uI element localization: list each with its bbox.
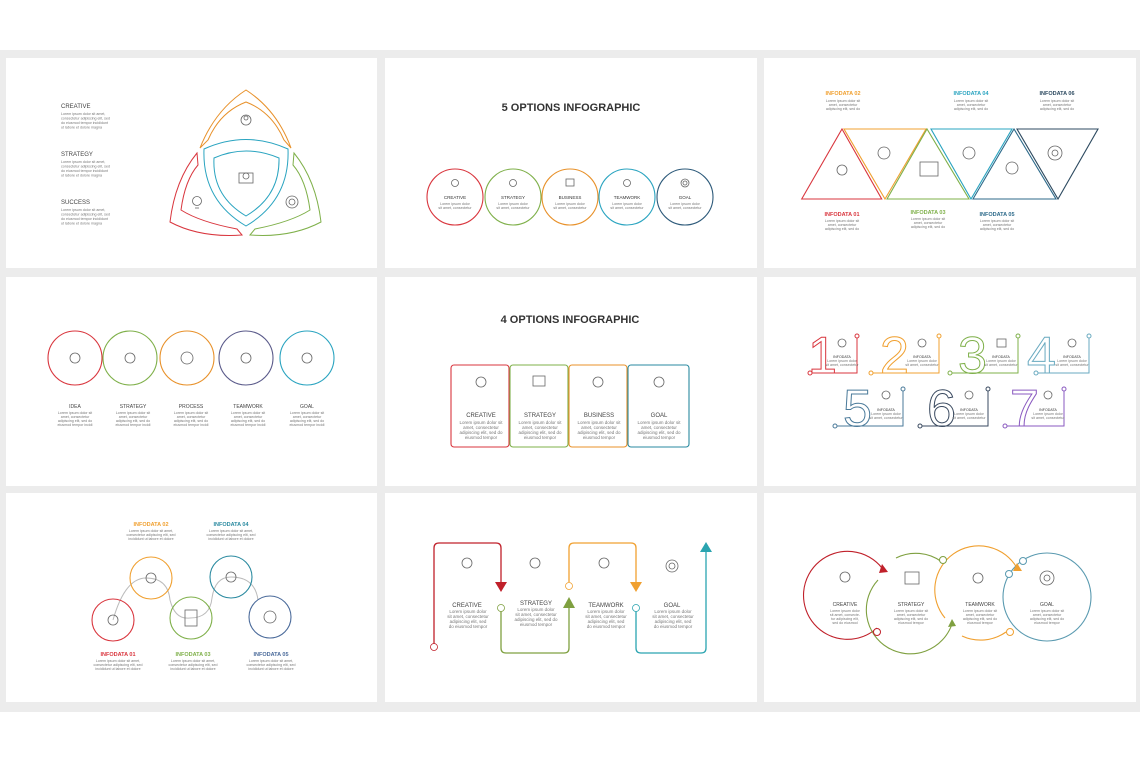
icons and labels: sit amet, consectetur: [825, 363, 859, 367]
labels: Lorem ipsum dolor: [449, 609, 487, 614]
panel: 5 options: [385, 58, 757, 268]
labels: INFODATA 02: [825, 91, 861, 97]
labels: eiusmod tempor incidi: [231, 423, 266, 427]
labels: [447, 601, 694, 629]
labels: INFODATA 04: [953, 91, 989, 97]
labels: INFODATA 02: [133, 522, 169, 528]
icons and labels: Lorem ipsum dolor: [1033, 412, 1064, 416]
icons and labels: sit amet, consectetur: [984, 363, 1018, 367]
labels: eiusmod tempor: [524, 435, 557, 440]
panel: wave circles: incididunt ut labore et dolore: [170, 667, 216, 671]
labels: GOAL: [664, 603, 681, 609]
panel: wave circles: incididunt ut labore et dolore: [95, 667, 141, 671]
digits: 2: [880, 327, 909, 385]
panel: triangles: Lorem ipsum dolor sit: [980, 219, 1014, 223]
labels: Lorem ipsum dolor sit: [290, 411, 324, 415]
icons and labels: Lorem ipsum dolor: [954, 412, 985, 416]
panel: wave circles: incididunt ut labore et dolore: [248, 667, 294, 671]
icons and labels: Lorem ipsum dolor: [1057, 359, 1088, 363]
text block: creative: consectetur adipiscing elit, sed: [61, 116, 110, 120]
labels: Lorem ipsum dolor sit: [459, 420, 503, 425]
labels: eiusmod tempor: [465, 435, 498, 440]
icons: [476, 376, 664, 387]
panel: wave circles: Lorem ipsum dolor sit amet,: [209, 529, 253, 533]
digits: 4: [1027, 327, 1056, 385]
panel: triangles: Lorem ipsum dolor sit: [954, 99, 988, 103]
labels: INFODATA 01: [824, 212, 860, 218]
icons and labels: INFODATA: [960, 408, 978, 412]
arrowheads: [879, 563, 1022, 627]
panel: wave circles: consectetur adipiscing elit, sed: [94, 663, 142, 667]
text block: strategy: [61, 152, 110, 178]
title: 5 OPTIONS INFOGRAPHIC: [502, 102, 640, 114]
labels: adipiscing elit, sed do: [116, 419, 150, 423]
panel: wave circles: Lorem ipsum dolor sit amet,: [129, 529, 173, 533]
labels: adipiscing elit, sed do: [577, 430, 621, 435]
labels: Lorem ipsum dolor: [612, 202, 643, 206]
text block: creative: ut labore et dolore magna: [61, 126, 102, 130]
labels: eiusmod tempor incidi: [58, 423, 93, 427]
digits: 1: [808, 327, 837, 385]
panel: wave circles: consectetur adipiscing elit, sed: [127, 533, 175, 537]
flow lines: [434, 543, 706, 653]
labels: INFODATA 01: [100, 652, 136, 658]
labels: STRATEGY: [898, 602, 925, 608]
labels: amet, consectetur: [234, 415, 263, 419]
labels: adipiscing elit, sed do: [1030, 617, 1064, 621]
labels: INFODATA 05: [979, 212, 1015, 218]
labels: adipiscing elit, sed do: [58, 419, 92, 423]
text block: strategy: do eiusmod tempor incididunt: [61, 169, 108, 173]
panel: triangles: amet, consectetur: [957, 103, 986, 107]
panel: arrow circles: [764, 493, 1136, 702]
circles chain: [427, 169, 713, 225]
labels: eiusmod tempor incidi: [290, 423, 325, 427]
labels: INFODATA 06: [1039, 91, 1075, 97]
connector lines: [810, 336, 1089, 426]
labels: Lorem ipsum dolor: [587, 609, 625, 614]
labels: amet, consectetur: [581, 425, 617, 430]
panel: wave circles: Lorem ipsum dolor sit amet,: [171, 659, 215, 663]
labels: Lorem ipsum dolor sit: [231, 411, 265, 415]
panel: triangles: amet, consectetur: [828, 223, 857, 227]
labels: adipiscing elit, sed do: [514, 617, 558, 622]
panel: triangles: [764, 58, 1136, 268]
text block: strategy: Lorem ipsum dolor sit amet,: [61, 160, 105, 164]
labels: adipiscing elit, sed do: [963, 617, 997, 621]
panel: triangles: adipiscing elit, sed do: [826, 107, 860, 111]
labels: adipiscing elit, sed: [450, 619, 487, 624]
labels: GOAL: [679, 195, 692, 200]
panel: wave circles: incididunt ut labore et dolore: [128, 537, 174, 541]
labels: INFODATA 03: [175, 652, 211, 658]
labels: [830, 602, 1064, 625]
labels: TEAMWORK: [614, 195, 640, 200]
labels: sit amet, consecte-: [830, 613, 861, 617]
labels: eiusmod tempor: [898, 621, 925, 625]
labels: eiusmod tempor: [520, 622, 553, 627]
panel: triangles: Lorem ipsum dolor sit: [1040, 99, 1074, 103]
text block: strategy: consectetur adipiscing elit, sed: [61, 164, 110, 168]
labels: INFODATA 04: [213, 522, 249, 528]
icon: target: [286, 196, 298, 208]
labels: tur adipiscing elit,: [831, 617, 859, 621]
labels: adipiscing elit, sed do: [518, 430, 562, 435]
labels: Lorem ipsum dolor sit: [963, 609, 997, 613]
text block: creative: Lorem ipsum dolor sit amet,: [61, 112, 105, 116]
labels: sit amet, consectetur: [553, 206, 587, 210]
labels: eiusmod tempor: [643, 435, 676, 440]
labels: INFODATA 05: [253, 652, 289, 658]
circles: [48, 331, 334, 385]
labels: sit amet, consectetur: [610, 206, 644, 210]
panel: 4 options: [385, 277, 757, 486]
panel: triangles: adipiscing elit, sed do: [954, 107, 988, 111]
icons and labels: INFODATA: [833, 355, 851, 359]
labels: amet, consectetur: [522, 425, 558, 430]
panel: wave circles: consectetur adipiscing elit, sed: [169, 663, 217, 667]
digits: 6: [927, 380, 956, 438]
icon: envelope: [239, 173, 253, 183]
labels: amet, consectetur: [293, 415, 322, 419]
panel: triangles: amet, consectetur: [983, 223, 1012, 227]
icons and labels: sit amet, consectetur: [905, 363, 939, 367]
labels: Lorem ipsum dolor: [440, 202, 471, 206]
labels: eiusmod tempor: [967, 621, 994, 625]
labels: amet, consectetur: [177, 415, 206, 419]
icon: bulb: [192, 196, 202, 208]
panel: numbers: [764, 277, 1136, 486]
labels: sit amet, consectetur: [652, 614, 694, 619]
icons and labels: INFODATA: [877, 408, 895, 412]
icons and labels: INFODATA: [1039, 408, 1057, 412]
icons and labels: sit amet, consectetur: [1031, 416, 1065, 420]
labels: BUSINESS: [584, 413, 614, 419]
labels: Lorem ipsum dolor sit: [577, 420, 621, 425]
digits: 5: [843, 380, 872, 438]
labels: [459, 413, 681, 440]
labels: CREATIVE: [452, 603, 482, 609]
labels: sit amet, consectetur: [585, 614, 627, 619]
labels: amet, consectetur: [966, 613, 995, 617]
text block: creative: do eiusmod tempor incididunt: [61, 121, 108, 125]
labels: [100, 522, 289, 658]
icons and labels: Lorem ipsum dolor: [907, 359, 938, 363]
text block: creative: [61, 104, 110, 130]
labels: adipiscing elit, sed do: [637, 430, 681, 435]
labels: adipiscing elit, sed do: [459, 430, 503, 435]
labels: PROCESS: [179, 404, 204, 410]
text block: success: do eiusmod tempor incididunt: [61, 217, 108, 221]
panel: circle chain: [6, 277, 377, 486]
labels: do eiusmod tempor: [654, 624, 693, 629]
labels: adipiscing elit, sed: [655, 619, 692, 624]
text block: success: Lorem ipsum dolor sit amet,: [61, 208, 105, 212]
labels: amet, consectetur: [641, 425, 677, 430]
labels: adipiscing elit, sed do: [174, 419, 208, 423]
text block: strategy: ut labore et dolore magna: [61, 174, 102, 178]
labels: Lorem ipsum dolor sit: [174, 411, 208, 415]
labels: Lorem ipsum dolor sit: [58, 411, 92, 415]
icons and labels: INFODATA: [992, 355, 1010, 359]
labels: amet, consectetur: [463, 425, 499, 430]
labels: sit amet, consectetur: [496, 206, 530, 210]
labels: GOAL: [300, 404, 314, 410]
icons and labels: INFODATA: [913, 355, 931, 359]
panel: wave circles: consectetur adipiscing elit, sed: [207, 533, 255, 537]
icon: head: [241, 115, 251, 125]
dots: [808, 334, 1091, 428]
panel: wave circles: consectetur adipiscing elit, sed: [247, 663, 295, 667]
icons and labels: Lorem ipsum dolor: [871, 412, 902, 416]
labels: eiusmod tempor: [1034, 621, 1061, 625]
labels: amet, consectetur: [1033, 613, 1062, 617]
panel: wave circles: incididunt ut labore et dolore: [208, 537, 254, 541]
labels: TEAMWORK: [965, 602, 995, 608]
icons and labels: [825, 339, 1089, 420]
labels: eiusmod tempor incidi: [174, 423, 209, 427]
labels: STRATEGY: [520, 601, 552, 607]
panel: triangles: adipiscing elit, sed do: [825, 227, 859, 231]
labels: adipiscing elit, sed do: [231, 419, 265, 423]
text block: success: consectetur adipiscing elit, sed: [61, 212, 110, 216]
labels: GOAL: [651, 413, 668, 419]
labels: amet, consectetur: [897, 613, 926, 617]
circles: [92, 556, 291, 641]
labels: amet, consectetur: [119, 415, 148, 419]
digits: [808, 327, 1056, 438]
digits: 7: [1010, 380, 1039, 438]
panel: wave circles: Lorem ipsum dolor sit amet,: [249, 659, 293, 663]
labels: sit amet, consectetur: [515, 612, 557, 617]
labels: IDEA: [69, 404, 81, 410]
trefoil diagram: [170, 90, 321, 235]
labels: do eiusmod tempor: [449, 624, 488, 629]
labels: do eiusmod tempor: [587, 624, 626, 629]
labels: GOAL: [1040, 602, 1054, 608]
labels: eiusmod tempor incidi: [116, 423, 151, 427]
icons and labels: sit amet, consectetur: [952, 416, 986, 420]
text block: strategy: STRATEGY: [61, 152, 93, 158]
labels: sed do eiusmod: [832, 621, 858, 625]
panel: step flow: [385, 493, 757, 702]
wave path: [113, 577, 258, 620]
icons and labels: INFODATA: [1063, 355, 1081, 359]
title: 4 OPTIONS INFOGRAPHIC: [501, 314, 639, 326]
panel: triangles: Lorem ipsum dolor sit: [825, 219, 859, 223]
boxes: [451, 365, 689, 447]
labels: INFODATA 03: [910, 210, 946, 216]
panel: triangles: amet, consectetur: [829, 103, 858, 107]
labels: TEAMWORK: [233, 404, 263, 410]
labels: eiusmod tempor: [583, 435, 616, 440]
panel: triangles: adipiscing elit, sed do: [980, 227, 1014, 231]
number dots: [430, 582, 640, 650]
panel: trefoil: [6, 58, 377, 268]
text block: success: [61, 200, 110, 226]
panel: wave circles: [6, 493, 377, 702]
labels: CREATIVE: [444, 195, 466, 200]
panel: triangles: Lorem ipsum dolor sit: [826, 99, 860, 103]
labels: adipiscing elit, sed do: [290, 419, 324, 423]
panel: triangles: adipiscing elit, sed do: [911, 225, 945, 229]
labels: TEAMWORK: [588, 603, 624, 609]
labels: Lorem ipsum dolor sit: [116, 411, 150, 415]
panel: triangles: adipiscing elit, sed do: [1040, 107, 1074, 111]
labels: CREATIVE: [833, 602, 858, 608]
icons: [452, 179, 689, 187]
panel: triangles: Lorem ipsum dolor sit: [911, 217, 945, 221]
triangle chain: [802, 129, 1098, 199]
icons and labels: sit amet, consectetur: [869, 416, 903, 420]
text block: success: SUCCESS: [61, 200, 90, 206]
labels: STRATEGY: [501, 195, 525, 200]
icons and labels: sit amet, consectetur: [1055, 363, 1089, 367]
text block: success: ut labore et dolore magna: [61, 222, 102, 226]
panel: triangles: amet, consectetur: [1043, 103, 1072, 107]
labels: sit amet, consectetur: [447, 614, 489, 619]
labels: [58, 404, 325, 427]
labels: [438, 195, 702, 210]
labels: Lorem ipsum dolor: [654, 609, 692, 614]
icons and labels: Lorem ipsum dolor: [986, 359, 1017, 363]
labels: [824, 91, 1075, 218]
labels: Lorem ipsum dolor: [830, 609, 861, 613]
icons: [837, 146, 1062, 176]
labels: Lorem ipsum dolor: [498, 202, 529, 206]
digits: 3: [958, 327, 987, 385]
labels: STRATEGY: [524, 413, 556, 419]
labels: Lorem ipsum dolor sit: [894, 609, 928, 613]
labels: STRATEGY: [120, 404, 147, 410]
panel: wave circles: Lorem ipsum dolor sit amet,: [96, 659, 140, 663]
labels: adipiscing elit, sed: [588, 619, 625, 624]
labels: Lorem ipsum dolor: [517, 607, 555, 612]
labels: Lorem ipsum dolor sit: [518, 420, 562, 425]
arrows: [495, 542, 712, 608]
labels: Lorem ipsum dolor sit: [637, 420, 681, 425]
labels: Lorem ipsum dolor: [670, 202, 701, 206]
labels: amet, consectetur: [61, 415, 90, 419]
labels: Lorem ipsum dolor: [555, 202, 586, 206]
icons: [70, 352, 312, 364]
labels: sit amet, consectetur: [438, 206, 472, 210]
labels: sit amet, consectetur: [668, 206, 702, 210]
text block: creative: CREATIVE: [61, 104, 91, 110]
circles: [804, 546, 1091, 654]
labels: BUSINESS: [559, 195, 581, 200]
icons and labels: Lorem ipsum dolor: [827, 359, 858, 363]
panel: triangles: amet, consectetur: [914, 221, 943, 225]
labels: adipiscing elit, sed do: [894, 617, 928, 621]
labels: CREATIVE: [466, 413, 496, 419]
labels: Lorem ipsum dolor sit: [1030, 609, 1064, 613]
